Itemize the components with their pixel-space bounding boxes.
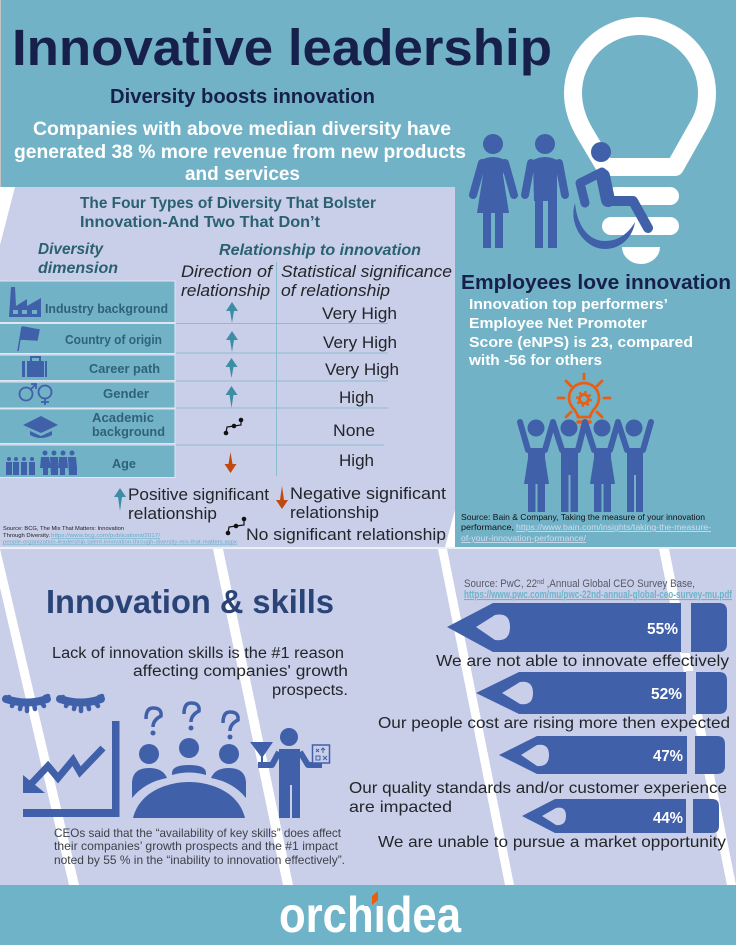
heading: innovation and skills: Innovation & skills: [46, 583, 334, 620]
icon: meeting with question marks: [132, 703, 246, 818]
source: Bain: [461, 512, 711, 543]
legend: relationship: [128, 504, 217, 523]
heading: four types of diversity: Innovation-And Two That Don’t: [80, 214, 321, 231]
column heading: direction and significance: [181, 263, 452, 300]
column heading: direction and significance: relationship: [181, 282, 270, 300]
legend: [114, 484, 446, 544]
heading: employees love innovation: Employees love innovation: [461, 272, 731, 294]
logo: orchidea: orchidea: [279, 887, 462, 943]
significance values: [322, 304, 399, 470]
source: BCG: Source: BCG, The Mix That Matters: Innovation: [3, 526, 124, 532]
significance values: Very High: [325, 360, 399, 379]
icon: negative arrow: [224, 452, 236, 473]
bar label: 55 percent: We are not able to innovate effectively: [436, 653, 729, 670]
bar label: 44 percent: We are unable to pursue a market opportunity: [378, 834, 726, 851]
text block: CEOs said: their companies’ growth prospects and the #1 impact: [54, 839, 339, 853]
bar: 55 percent: [447, 602, 727, 653]
icon: closed eyes: [5, 696, 102, 711]
bar: 47 percent: 47%: [653, 748, 683, 765]
chart: pencil bars: [349, 602, 730, 851]
source: BCG: people-organization-leadership-talent-innovation-through-diversity-mix-that-matters.aspx: [3, 540, 237, 546]
significance values: Very High: [323, 333, 397, 352]
bar: 44 percent: [522, 798, 719, 834]
text block: lack of skills: affecting companies' growth: [133, 663, 348, 680]
source: BCG: [3, 526, 237, 546]
source: Bain: of-your-innovation-performance/: [461, 533, 587, 543]
bar: 52 percent: 52%: [651, 686, 682, 703]
subtitle: Diversity boosts innovation: [110, 86, 375, 108]
significance values: High: [339, 451, 374, 470]
text block: eNPS: Innovation top performers’: [469, 296, 668, 313]
heading: four types of diversity: [80, 195, 376, 231]
icon: age groups: [6, 450, 77, 475]
icon: orange idea bulb: [558, 374, 610, 430]
legend: Negative significant: [290, 484, 446, 503]
source: Bain: performance,: [461, 522, 514, 532]
source: BCG: Through Diversity.: [3, 533, 51, 539]
footer band: [0, 885, 736, 945]
significance values: Very High: [322, 304, 397, 323]
panel: innovation and skills: [5, 578, 732, 867]
source: PwC: nd: [537, 579, 544, 586]
column heading: relationship to innovation: Relationship to innovation: [219, 242, 421, 259]
text block: eNPS: Score (eNPS) is 23, compared: [469, 334, 693, 351]
text block: eNPS: with -56 for others: [468, 352, 602, 369]
icon: positive arrows: [226, 302, 238, 408]
bar: 55 percent: 55%: [647, 621, 678, 638]
legend: Positive significant: [128, 485, 269, 504]
text block: revenue statement: Companies with above median diversity have: [33, 119, 451, 140]
bar: 44 percent: 44%: [653, 810, 683, 827]
column heading: diversity dimension: dimension: [38, 260, 118, 277]
row labels: [45, 301, 168, 471]
text block: revenue statement: generated 38 % more revenue from new products: [14, 142, 466, 163]
text block: lack of skills: prospects.: [272, 682, 348, 699]
bar label: 52 percent: Our people cost are rising more then expected: [378, 715, 730, 732]
icon: suitcase: [22, 356, 47, 377]
icon: gender symbols: [20, 384, 52, 405]
bar label: 47 percent: are impacted: [349, 799, 452, 816]
text block: eNPS: [468, 296, 693, 369]
row labels: Career path: [89, 361, 160, 376]
text block: CEOs said: [54, 826, 345, 867]
legend: relationship: [290, 503, 379, 522]
title: Innovative leadership: [12, 19, 552, 76]
significance values: None: [333, 421, 375, 440]
column heading: direction and significance: Statistical significance: [281, 263, 452, 281]
icon: white lightbulb: [573, 26, 707, 264]
text block: eNPS: Employee Net Promoter: [469, 315, 647, 332]
icon: declining chart: [23, 721, 120, 817]
text block: CEOs said: noted by 55 % in the “inability to innovation effectively”.: [54, 853, 345, 867]
bar label: 47 percent: [349, 780, 727, 816]
source: PwC: ,Annual Global CEO Survey Base,: [544, 578, 695, 590]
text block: lack of skills: [52, 645, 348, 699]
row labels: Country of origin: [65, 332, 162, 347]
row labels: Industry background: [45, 301, 168, 316]
legend: No significant relationship: [246, 525, 446, 544]
column heading: direction and significance: Direction of: [181, 263, 275, 281]
text block: revenue statement: and services: [185, 164, 300, 185]
source: PwC: [464, 578, 732, 601]
icon: no relationship connector: [224, 418, 243, 435]
text block: revenue statement: [14, 119, 466, 185]
row labels: Gender: [103, 386, 149, 401]
panel: diversity table: [0, 195, 452, 546]
bar: 52 percent: [476, 671, 727, 715]
significance values: High: [339, 388, 374, 407]
heading: four types of diversity: The Four Types of Diversity That Bolster: [80, 195, 376, 212]
row labels: Academic: [92, 410, 154, 425]
column heading: direction and significance: of relationship: [281, 282, 390, 300]
row labels: Age: [112, 456, 136, 471]
column heading: diversity dimension: [38, 241, 118, 277]
icon: factory: [9, 287, 41, 317]
icon: person with glass and board: [250, 728, 330, 818]
icon: four people raising hands: [520, 420, 651, 512]
icon: flag: [18, 327, 39, 351]
source: Bain: https://www.bain.com/insights/taking-the-measure-: [516, 522, 711, 532]
bar: 47 percent: [499, 735, 725, 775]
row labels: background: [92, 424, 165, 439]
source: PwC: Source: PwC, 22: [464, 578, 547, 590]
text block: CEOs said: CEOs said that the “availability of key skills” does affect: [54, 826, 342, 840]
text block: lack of skills: Lack of innovation skills is the #1 reason: [52, 645, 344, 662]
column heading: diversity dimension: Diversity: [38, 241, 104, 258]
panel: employees love innovation: [461, 272, 731, 543]
icon: woman, man and wheelchair user: [473, 134, 648, 249]
bar label: 47 percent: Our quality standards and/or customer experience: [349, 780, 727, 797]
source: Bain: Source: Bain & Company, Taking the measure of your innovation: [461, 512, 705, 522]
source: BCG: https://www.bcg.com/publications/2017/: [51, 533, 161, 539]
icon: graduation cap: [23, 416, 58, 438]
